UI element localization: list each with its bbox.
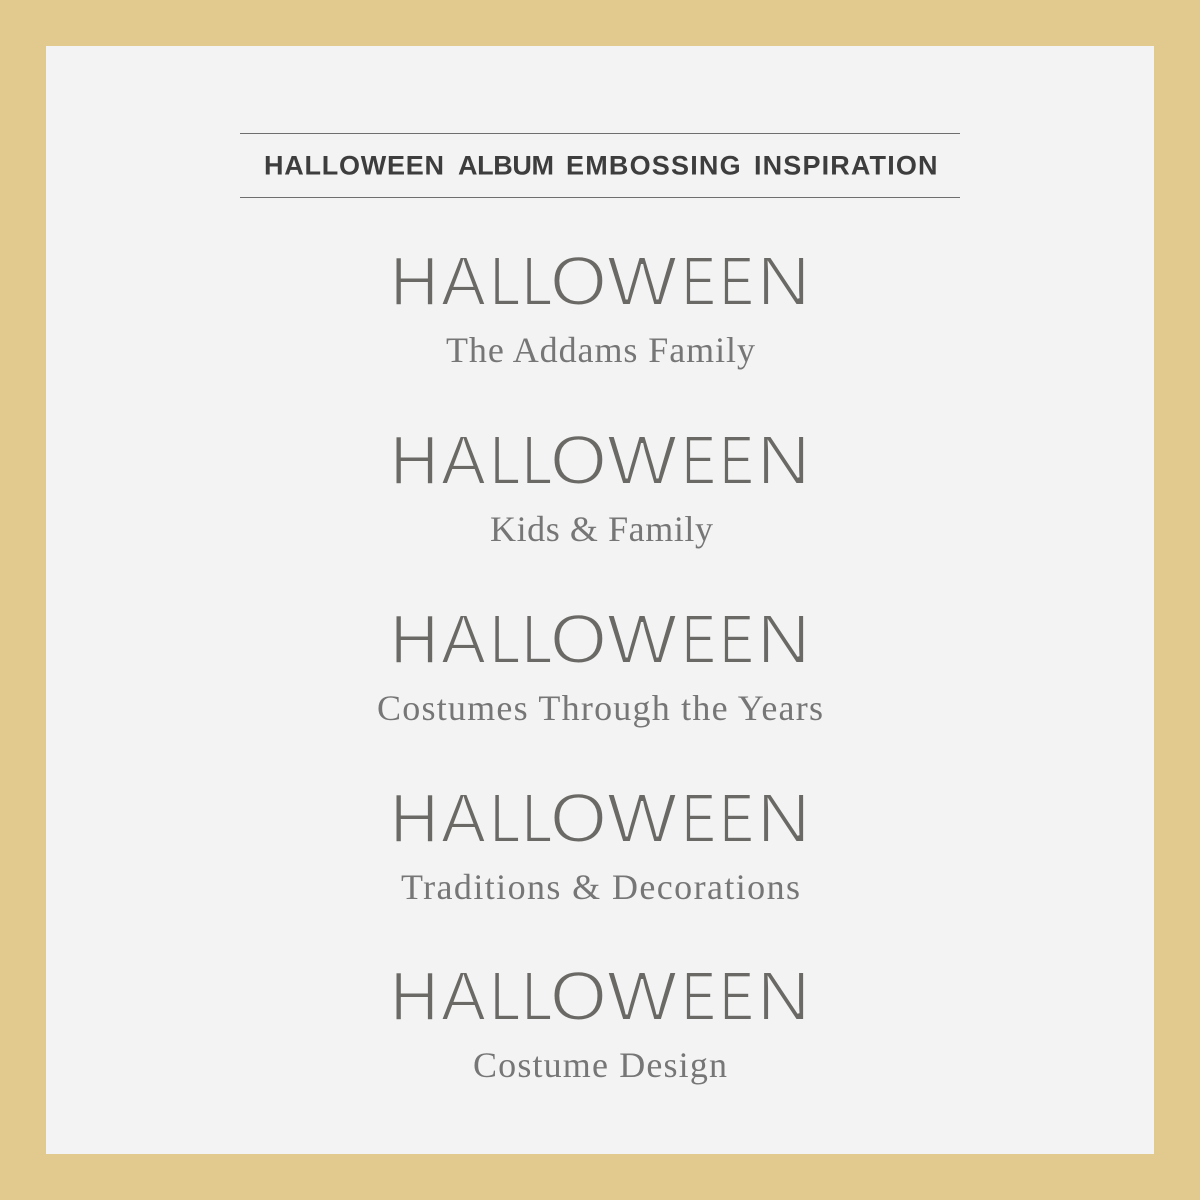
embossing sample word: H xyxy=(390,957,438,1035)
heading: title between rules xyxy=(240,133,960,198)
embossing sample word: E xyxy=(720,957,754,1035)
row: Costumes Through the Years xyxy=(377,600,823,728)
embossing sample word: W xyxy=(607,421,677,499)
caption: Traditions & Decorations: Traditions & Decorations xyxy=(401,867,800,907)
embossing sample word: N xyxy=(757,600,810,678)
embossing sample word: A xyxy=(441,957,486,1035)
embossing sample word: E xyxy=(720,600,754,678)
embossing sample word: O xyxy=(550,957,606,1035)
embossing sample word: A xyxy=(441,242,486,320)
heading: title between rules: INSPIRATION xyxy=(754,150,939,180)
embossing sample word: N xyxy=(757,957,810,1035)
embossing sample word: A xyxy=(441,779,486,857)
caption: The Addams Family: The Addams Family xyxy=(446,330,755,370)
embossing sample word: N xyxy=(757,242,810,320)
embossing sample word: L xyxy=(490,600,520,678)
embossing sample word xyxy=(390,421,810,499)
embossing sample word: H xyxy=(390,779,438,857)
embossing sample word: N xyxy=(757,421,810,499)
embossing sample word: L xyxy=(490,421,520,499)
embossing sample word: L xyxy=(490,957,520,1035)
embossing sample word: O xyxy=(550,779,606,857)
embossing sample word xyxy=(390,779,810,857)
embossing sample word: L xyxy=(522,242,552,320)
embossing sample word: A xyxy=(441,421,486,499)
embossing sample word xyxy=(390,957,810,1035)
embossing sample word: E xyxy=(720,779,754,857)
embossing sample word: E xyxy=(682,779,716,857)
embossing sample word xyxy=(390,242,810,320)
embossing sample word: A xyxy=(441,600,486,678)
embossing sample word: E xyxy=(720,421,754,499)
row: Traditions & Decorations xyxy=(390,779,810,907)
caption: Costumes Through the Years: Costumes Through the Years xyxy=(377,688,823,728)
embossing sample word: O xyxy=(550,600,606,678)
row: The Addams Family xyxy=(390,242,810,370)
embossing sample word: E xyxy=(682,242,716,320)
row: Costume Design xyxy=(390,957,810,1085)
caption: Kids & Family: Kids & Family xyxy=(490,509,713,549)
embossing sample word: L xyxy=(490,779,520,857)
embossing sample word: E xyxy=(682,421,716,499)
embossing sample word: H xyxy=(390,421,438,499)
embossing sample word: H xyxy=(390,600,438,678)
embossing sample word: L xyxy=(490,242,520,320)
embossing sample word: N xyxy=(757,779,810,857)
caption: Costume Design: Costume Design xyxy=(473,1045,727,1085)
heading: title between rules: EMBOSSING xyxy=(566,150,751,180)
embossing sample word: O xyxy=(550,242,606,320)
embossing sample word: W xyxy=(607,779,677,857)
embossing sample word: H xyxy=(390,242,438,320)
embossing sample word: L xyxy=(522,957,552,1035)
embossing sample word: W xyxy=(607,242,677,320)
embossing sample word: O xyxy=(550,421,606,499)
embossing sample word: E xyxy=(720,242,754,320)
embossing sample word: E xyxy=(682,600,716,678)
row: Kids & Family xyxy=(390,421,810,549)
embossing sample word: L xyxy=(522,779,552,857)
heading: title between rules: HALLOWEEN xyxy=(264,150,453,180)
embossing sample word: W xyxy=(607,957,677,1035)
heading: title between rules: ALBUM xyxy=(458,150,561,180)
embossing sample word: W xyxy=(607,600,677,678)
embossing sample word: E xyxy=(682,957,716,1035)
embossing sample word: L xyxy=(522,600,552,678)
embossing sample word: L xyxy=(522,421,552,499)
embossing sample word xyxy=(390,600,810,678)
